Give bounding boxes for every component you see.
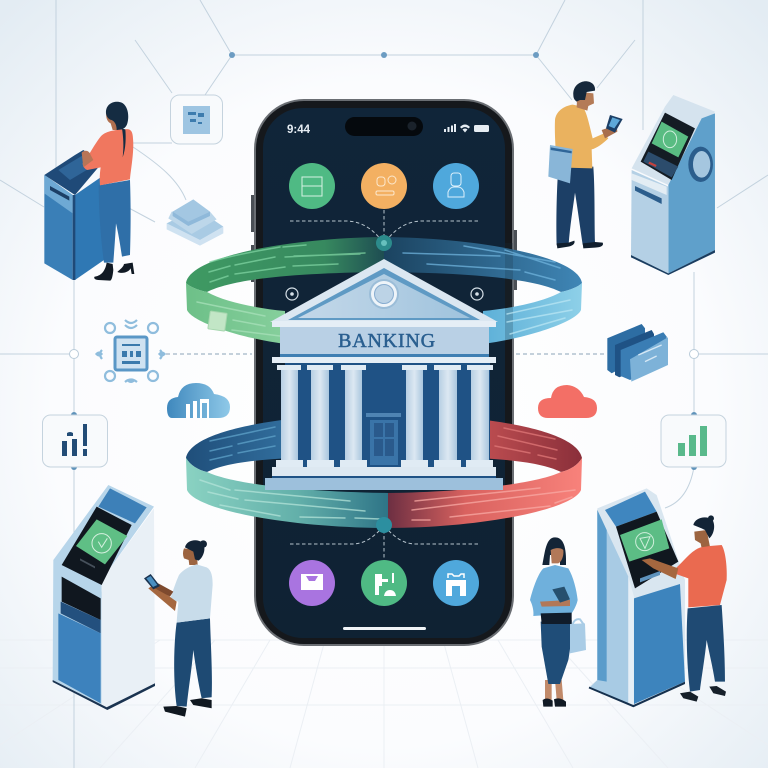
upper band front left [186, 283, 285, 344]
atm screen [641, 113, 695, 180]
trousers [556, 167, 595, 245]
atm: top right [631, 95, 715, 275]
screen [76, 519, 127, 564]
upper band small card icon [208, 311, 227, 331]
pediment medallion [369, 279, 399, 309]
sweater [530, 565, 578, 616]
top [83, 129, 133, 185]
face [551, 548, 563, 563]
box icon: bar chart left [42, 415, 108, 467]
upper band front right [483, 283, 582, 344]
shoes [163, 698, 212, 717]
trousers [541, 620, 572, 684]
ribbon: upper band [186, 235, 582, 344]
floor grid [0, 640, 768, 768]
screen [620, 519, 669, 562]
bank building [265, 259, 503, 490]
icon: stacked papers [167, 199, 223, 246]
box icon: bar chart right [661, 415, 726, 467]
app icon: green [289, 163, 335, 209]
lower dashed connectors [290, 530, 478, 560]
trousers [687, 605, 725, 692]
status icons [444, 124, 489, 132]
face [106, 108, 120, 130]
dashed connectors [166, 353, 607, 355]
app icon: green lower [361, 560, 407, 606]
bank back wall [285, 360, 490, 468]
box icon: document [170, 95, 222, 144]
network nodes [70, 52, 698, 470]
phone [251, 99, 517, 646]
shirt [676, 545, 727, 607]
upper band back right [384, 237, 582, 292]
lower band node [376, 517, 392, 533]
shirt [170, 564, 213, 623]
lower band back right [478, 419, 582, 472]
app icon: purple [289, 560, 335, 606]
ribbon: lower band [186, 419, 582, 533]
lower band front right [388, 458, 582, 528]
app icon: blue lower [433, 560, 479, 606]
atm: bottom right [589, 488, 685, 707]
hair [106, 102, 128, 130]
steps [272, 467, 496, 476]
atm dial [688, 147, 713, 182]
atm: top left [44, 150, 104, 280]
status time: 9:44 [287, 124, 311, 136]
app icon: blue [433, 163, 479, 209]
person: man yellow sweater [548, 81, 623, 248]
shoes [557, 241, 603, 248]
phone body [254, 99, 514, 646]
columns [276, 365, 493, 467]
shoes [543, 698, 566, 707]
upper band text lines [197, 245, 572, 336]
lower band text lines [200, 427, 575, 520]
hair [185, 540, 204, 561]
hands and phone [540, 600, 570, 607]
upper band node [376, 235, 392, 251]
legs [545, 680, 563, 700]
cornice [272, 321, 496, 327]
trousers [174, 618, 212, 707]
phone screen [263, 108, 505, 638]
bag [570, 623, 586, 653]
hair [542, 537, 566, 565]
shoes [680, 686, 726, 702]
bank name: BANKING [338, 330, 436, 352]
phone [144, 574, 160, 589]
frieze [280, 327, 489, 355]
upper dashed connectors [290, 210, 478, 240]
pediment [270, 259, 498, 322]
person: woman with blue sweater [530, 537, 586, 707]
icon: chip network [95, 320, 166, 383]
lower band back left [186, 419, 290, 472]
lower cornice [272, 357, 496, 363]
icon: blue cloud with bars [167, 383, 230, 418]
bag [548, 145, 573, 183]
icon: cards stack [607, 324, 668, 382]
small target icons [286, 288, 483, 300]
icon: red cloud [538, 385, 597, 418]
person: man coral shirt at atm [642, 515, 727, 702]
phone buttons [251, 195, 517, 290]
hair [693, 517, 714, 538]
upper band back left [186, 237, 384, 292]
person: man with phone [144, 540, 213, 717]
home bar [343, 627, 426, 630]
jeans [99, 180, 131, 263]
face [183, 548, 198, 565]
app icon: orange [361, 163, 407, 209]
hand and phone [602, 125, 617, 138]
face [577, 92, 594, 111]
upper band phone edge showing through [505, 243, 513, 340]
hand [82, 151, 93, 167]
sweater [555, 105, 608, 168]
notch [345, 117, 423, 136]
hair [573, 81, 595, 102]
person: woman coral top [82, 102, 134, 281]
arm [642, 558, 678, 579]
shoes [94, 263, 134, 281]
braid [122, 129, 126, 157]
door [366, 413, 401, 465]
face [694, 530, 710, 548]
lower band front left [186, 458, 388, 528]
arms [148, 585, 177, 611]
atm: bottom left [53, 485, 155, 710]
